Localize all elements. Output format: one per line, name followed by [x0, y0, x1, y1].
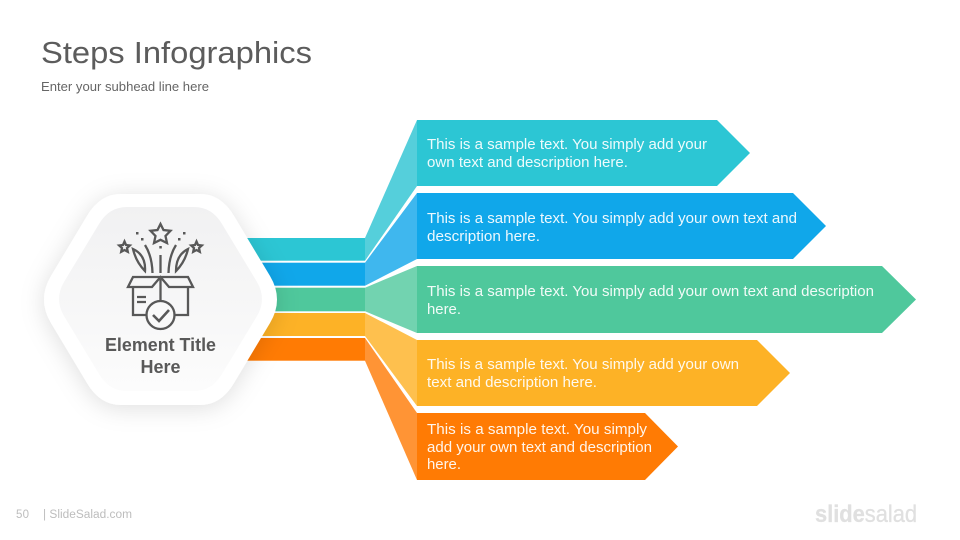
arrow 5: This is a sample text. You simply: [427, 422, 648, 438]
arrow 2: description here.: [427, 229, 540, 245]
arrow 5: add your own text and description: [427, 440, 652, 456]
arrow 2: This is a sample text. You simply add your own text and: [427, 211, 797, 227]
arrow 5: here.: [427, 457, 461, 473]
title: Steps Infographics: [41, 35, 312, 70]
hexagon badge: [44, 194, 277, 405]
arrow 1: This is a sample text. You simply add your: [427, 137, 707, 153]
arrow 4: [417, 340, 790, 406]
arrow 3: This is a sample text. You simply add your own text and description: [427, 284, 874, 300]
logo: slidesalad: [815, 501, 917, 528]
icon dots: [136, 232, 186, 248]
arrow 3: here.: [427, 302, 461, 318]
icon: gift box with stars and check: [119, 224, 202, 329]
connector bars: [225, 238, 365, 361]
element title: Element Title: [105, 335, 216, 355]
arrow 4: text and description here.: [427, 375, 597, 391]
footer brand: | SlideSalad.com: [43, 509, 132, 521]
arrow 4: This is a sample text. You simply add your own: [427, 357, 739, 373]
arrow 1: own text and description here.: [427, 155, 628, 171]
arrow 1: [417, 120, 750, 186]
page number: 50: [16, 509, 29, 521]
folded ribbon segments: [365, 120, 417, 480]
element title: Here: [140, 357, 180, 377]
arrow 2: [417, 193, 826, 259]
arrow 5: [417, 413, 678, 480]
arrow 3: [417, 266, 916, 333]
subhead: Enter your subhead line here: [41, 80, 209, 94]
